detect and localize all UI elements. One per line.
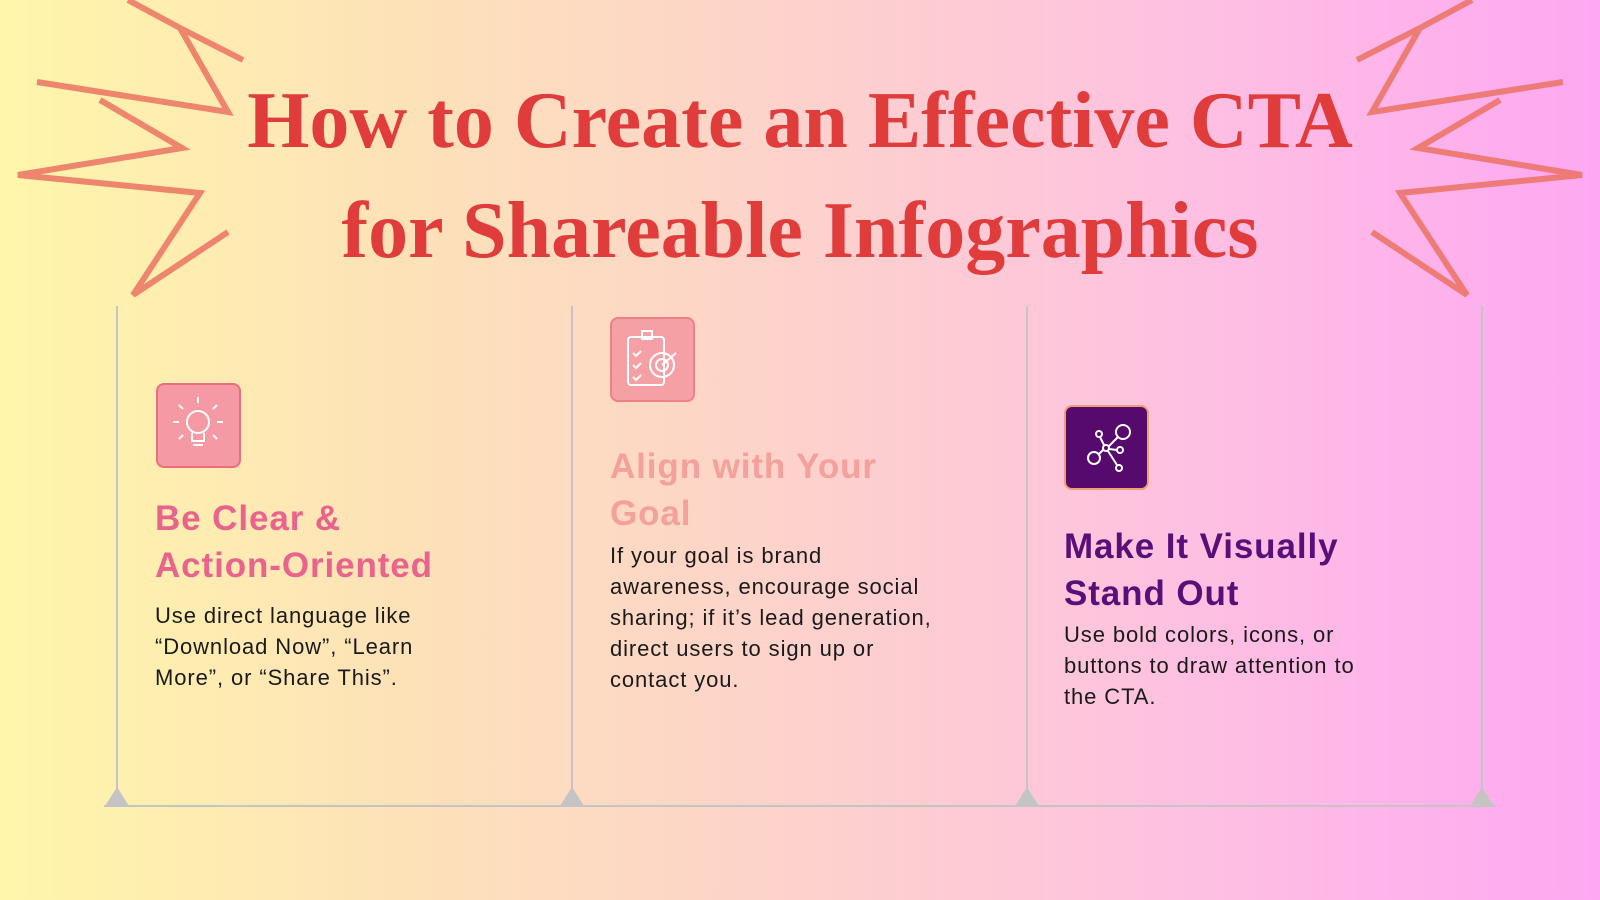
heading: Goal xyxy=(610,494,691,533)
icon: clipboard target xyxy=(610,317,695,402)
body text: If your goal is brand xyxy=(610,543,822,568)
starburst right xyxy=(1357,0,1582,295)
body text: Use bold colors, icons, or xyxy=(1064,622,1334,647)
body text xyxy=(610,543,932,692)
body text: Use direct language like xyxy=(155,603,411,628)
title: How to Create an Effective CTA xyxy=(247,77,1353,165)
timeline frame xyxy=(104,306,1496,806)
heading: Make It Visually xyxy=(1064,527,1338,566)
title: for Shareable Infographics xyxy=(341,187,1259,275)
heading: Be Clear & xyxy=(155,499,341,538)
body text: “Download Now”, “Learn xyxy=(155,634,413,659)
heading: Align with Your xyxy=(610,447,877,486)
body text xyxy=(155,603,413,690)
icon: lightbulb xyxy=(156,383,241,468)
heading xyxy=(155,499,433,585)
body text: buttons to draw attention to xyxy=(1064,653,1355,678)
title xyxy=(247,77,1353,275)
heading xyxy=(1064,527,1338,613)
body text xyxy=(1064,622,1355,709)
starburst left xyxy=(18,0,243,295)
body text: sharing; if it’s lead generation, xyxy=(610,605,932,630)
heading: Action-Oriented xyxy=(155,546,433,585)
panel: visually stand out xyxy=(1064,405,1355,709)
heading: Stand Out xyxy=(1064,574,1239,613)
body text: awareness, encourage social xyxy=(610,574,919,599)
icon: network xyxy=(1064,405,1149,490)
body text: the CTA. xyxy=(1064,684,1156,709)
panel: align goal xyxy=(610,317,932,692)
panel: be clear xyxy=(155,383,433,690)
body text: More”, or “Share This”. xyxy=(155,665,398,690)
body text: contact you. xyxy=(610,667,739,692)
heading xyxy=(610,447,877,533)
body text: direct users to sign up or xyxy=(610,636,874,661)
